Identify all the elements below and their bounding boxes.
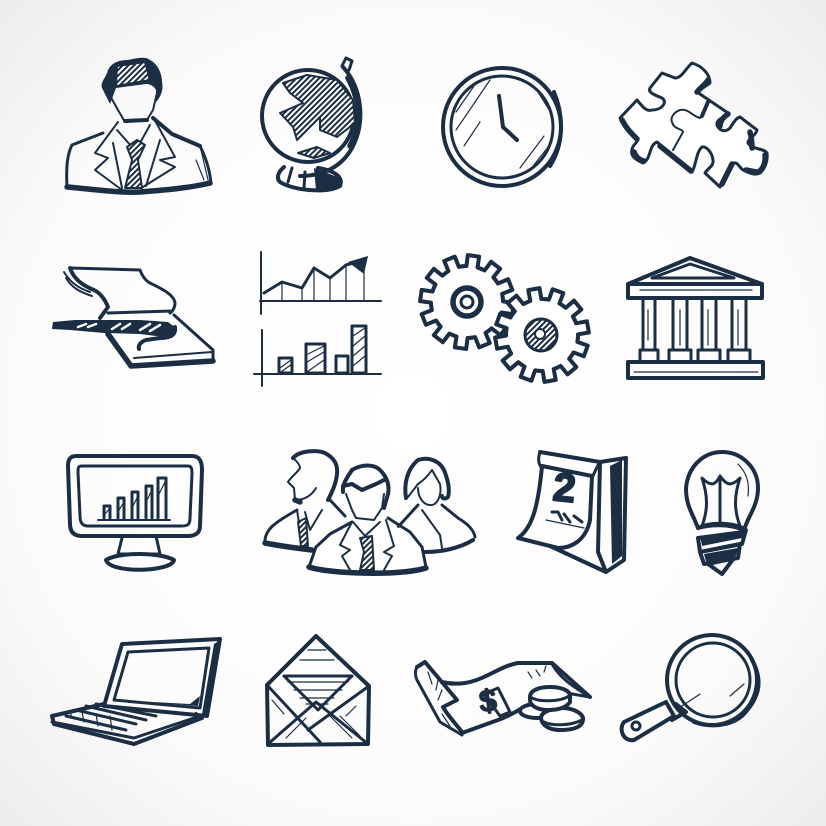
icon: light bulb [686,452,758,574]
icon: laptop [52,639,220,744]
icon: two gears [414,249,602,395]
chart: line and bar graphs [254,252,381,386]
woman [398,459,475,552]
icon: magnifying glass [622,635,759,740]
icon: tear-off calendar [518,452,626,572]
icon: tear-off calendar: 2 [551,465,578,511]
icon: computer monitor with chart [68,456,202,570]
icon: wall clock [443,68,561,186]
icon: quill and open notebook [52,268,213,367]
icon: banknote roll and coins [415,662,590,735]
left man [265,451,345,550]
icon: classical bank building [628,258,763,378]
icon: businessman [67,58,211,192]
icon: jigsaw puzzle pieces [620,63,767,187]
icon: open envelope [267,636,369,745]
icon: desk globe [262,58,360,190]
coins [520,687,583,730]
front man [309,466,426,573]
icon: team of three people [265,451,475,573]
icon: banknote roll and coins: $ [477,684,499,719]
